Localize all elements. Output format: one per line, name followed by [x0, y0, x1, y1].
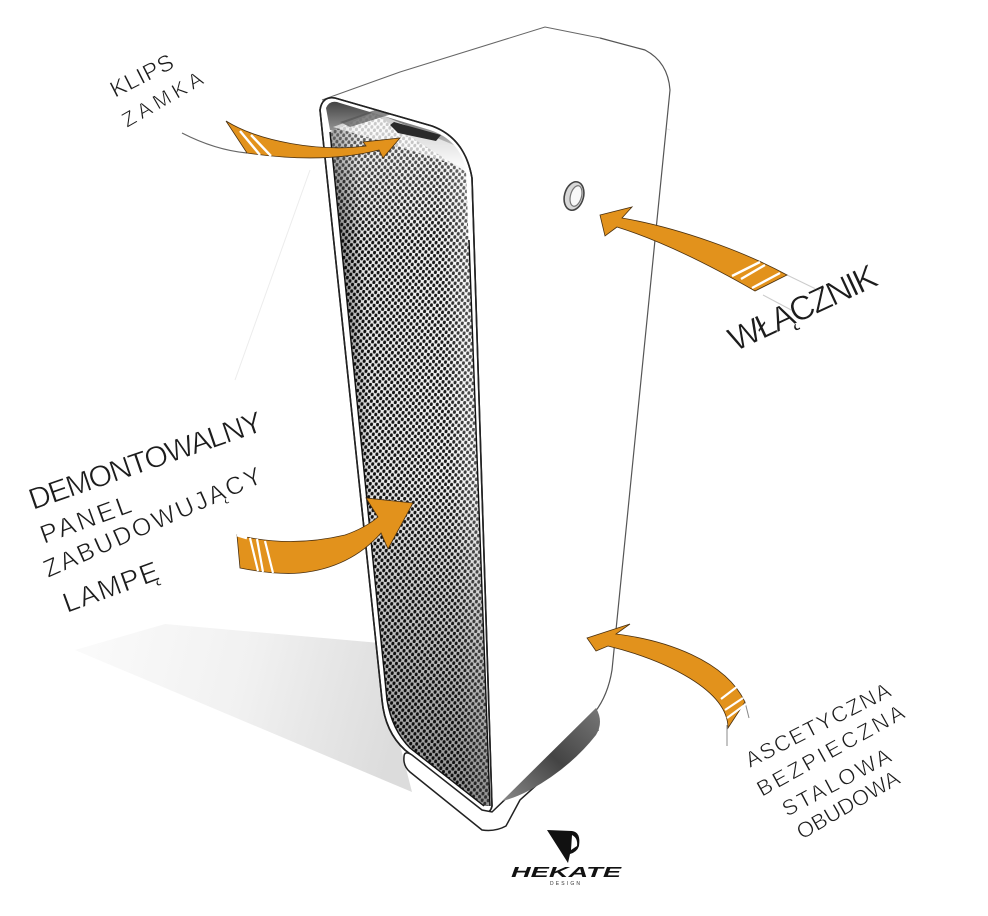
wordmark: HEKATE [511, 864, 623, 881]
label: removable panel: DEMONTOWALNY [25, 406, 267, 517]
body side panel [322, 27, 670, 810]
label: lock clip [105, 48, 207, 132]
label: power switch: WŁĄCZNIK [722, 257, 884, 359]
logo mark [547, 830, 579, 863]
tagline: DESIGN [550, 881, 580, 887]
lock clip [390, 122, 441, 141]
frame outline [320, 98, 492, 812]
device [320, 27, 670, 812]
label: lock clip: ZAMKA [118, 67, 207, 132]
arrow: steel casing [587, 624, 749, 746]
panel edge shading [330, 132, 490, 806]
label: removable panel [25, 406, 267, 619]
body right edge [595, 38, 670, 712]
label: steel casing: ASCETYCZNA [741, 677, 895, 772]
label: removable panel: PANEL [36, 489, 135, 550]
label: removable panel: LAMPĘ [58, 555, 163, 619]
label: removable panel: ZABUDOWUJĄCY [39, 462, 266, 583]
perforated panel [330, 113, 490, 806]
power button [561, 180, 587, 212]
label: steel casing: BEZPIECZNA [752, 699, 909, 801]
arrow: lock clip [182, 121, 400, 158]
label: steel casing [741, 677, 909, 844]
base shadow puck [502, 708, 600, 801]
body top edge [322, 27, 600, 100]
hood top sheet [333, 112, 466, 168]
front frame [320, 98, 492, 812]
label: steel casing: STALOWA [778, 743, 896, 821]
hood recess [326, 102, 466, 170]
label: steel casing: OBUDOWA [792, 765, 904, 844]
construction lines [235, 55, 670, 800]
arrow: power switch [600, 207, 820, 312]
base plate [404, 708, 600, 830]
label: lock clip: KLIPS [105, 48, 178, 102]
arrow: removable panel [237, 498, 413, 573]
hood shadow [340, 110, 392, 127]
floor shadow [75, 624, 412, 792]
logo: Hekate Design [511, 830, 623, 887]
